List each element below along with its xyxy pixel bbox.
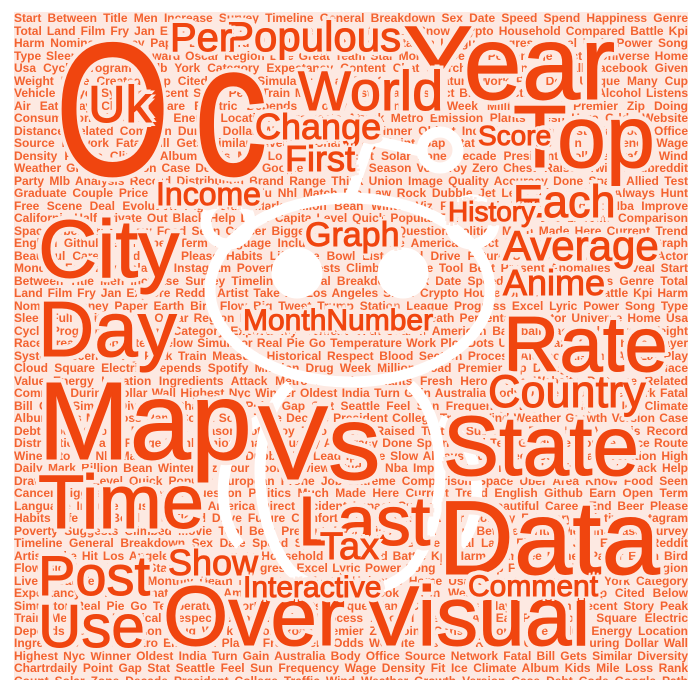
word: Uk: Uk: [88, 76, 152, 134]
word: First: First: [285, 138, 355, 179]
big word: Use: Use: [38, 593, 145, 660]
word: Change: Change: [255, 106, 381, 147]
word: Score: Score: [478, 120, 551, 151]
word: MonthNumber: MonthNumber: [243, 304, 433, 337]
word: Show: Show: [168, 542, 258, 583]
big word: Rate: Rate: [503, 300, 668, 388]
big word: Country: Country: [488, 366, 646, 417]
word: Graph: Graph: [305, 216, 400, 254]
word: Anime: Anime: [503, 262, 605, 303]
big word: Top: Top: [513, 87, 655, 186]
big word: Last: Last: [298, 482, 430, 560]
word: Tax: Tax: [320, 526, 379, 568]
word: History: History: [448, 196, 535, 227]
big word: Day: Day: [38, 285, 177, 373]
big word: State: State: [443, 399, 639, 493]
big word: Data: Data: [438, 480, 660, 597]
big word: Map: Map: [38, 360, 252, 483]
big word: Post: Post: [38, 544, 150, 607]
word: Comment: Comment: [468, 570, 598, 603]
big word: City: City: [38, 204, 179, 295]
word: Average: Average: [503, 222, 659, 269]
big word: Oc: Oc: [55, 4, 291, 216]
word: Interactive: Interactive: [243, 571, 381, 604]
big word: Vs: Vs: [258, 385, 381, 502]
big word: Time: Time: [38, 460, 204, 545]
big word: Year: Year: [403, 5, 615, 122]
word: Income: Income: [156, 176, 261, 212]
word: World: World: [298, 59, 443, 122]
word: Per: Per: [170, 16, 232, 60]
word: Each: Each: [513, 176, 616, 227]
big word: Over: Over: [163, 569, 345, 663]
word: Populous: Populous: [226, 13, 401, 60]
big word: Visual: Visual: [363, 569, 590, 663]
